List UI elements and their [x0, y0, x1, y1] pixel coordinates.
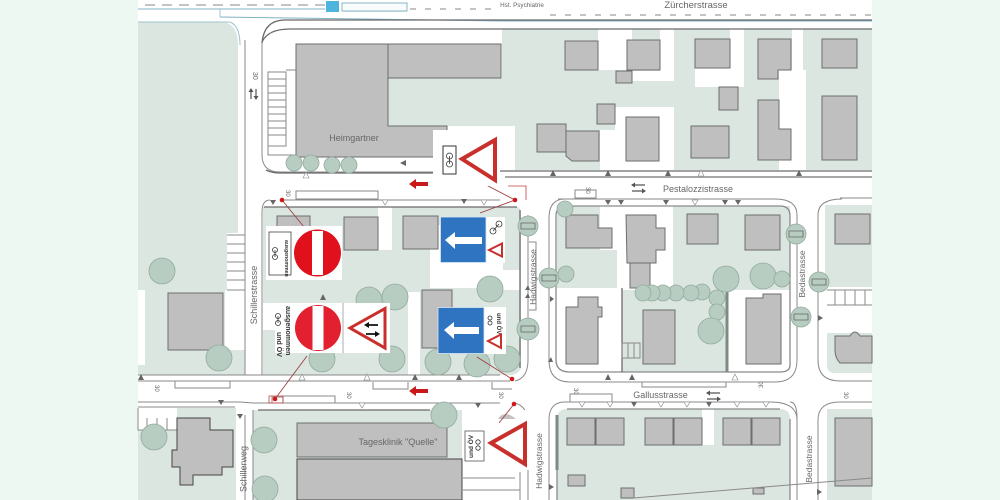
- bus stop marker: [326, 1, 407, 12]
- road markings: one-way arrows and 30 zones: 30: [572, 388, 578, 395]
- supplementary text plate: [275, 306, 291, 357]
- street and place labels: Schillerweg: [238, 446, 248, 492]
- yield triangle: [462, 140, 495, 180]
- yield triangle: [491, 424, 525, 464]
- small warning triangle: [488, 334, 501, 348]
- street and place labels: Bedastrasse: [797, 250, 807, 298]
- plate: und ÖV: [466, 434, 475, 458]
- no entry disc: [295, 305, 341, 351]
- panel: green plots: [138, 22, 872, 500]
- road markings: one-way arrows and 30 zones: 30: [759, 381, 765, 388]
- diagonal line: [633, 478, 872, 498]
- plate text: und ÖV: [495, 313, 502, 334]
- street and place labels: Hadwigstrasse: [528, 249, 538, 305]
- road markings: one-way arrows and 30 zones: [153, 72, 848, 402]
- street and place labels: Zürcherstrasse: [664, 0, 728, 11]
- sign: no entry and two-way traffic warning: [263, 303, 390, 357]
- buildings: [168, 39, 872, 500]
- sign: one-way with bicycles and public transport, Gallus side: [438, 307, 506, 354]
- two-way warning triangle: [350, 308, 385, 348]
- road markings: one-way arrows and 30 zones: 30: [584, 187, 590, 194]
- arrow: red direction Pestalozzistrasse: [409, 179, 428, 189]
- road markings: one-way arrows and 30 zones: 30: [153, 385, 159, 392]
- small warning triangle: [489, 244, 502, 256]
- no entry disc: [294, 230, 341, 276]
- road markings: one-way arrows and 30 zones: 30: [345, 392, 351, 399]
- street and place labels: Gallusstrasse: [633, 390, 688, 400]
- road markings: one-way arrows and 30 zones: 30: [497, 392, 503, 399]
- panel: road lines: [138, 5, 872, 500]
- supplementary plate: ausgenommen: [283, 240, 289, 277]
- street and place labels: Hst. Psychiatrie: [500, 2, 544, 9]
- sign: yield with bicycle plate, Pestalozzistrasse: [433, 130, 500, 186]
- street and place labels: Schillerstrasse: [249, 266, 259, 324]
- map: base plan: [138, 0, 872, 500]
- street and place labels: Hadwigstrasse: [534, 433, 544, 489]
- supplementary text plate: und ÖV: [275, 332, 284, 357]
- sign: yield with bicycle and public transport plate, Hadwigstrasse: [463, 402, 530, 470]
- bicycle: [490, 221, 502, 234]
- street and place labels: Tagesklinik "Quelle": [359, 437, 437, 447]
- panel: white yards and drives: [138, 28, 806, 445]
- trees: [141, 155, 829, 500]
- arrow: red direction Gallusstrasse: [409, 386, 428, 396]
- street and place labels: Bedastrasse: [804, 435, 814, 483]
- road markers: triangles: [138, 160, 823, 495]
- white arrow: [445, 232, 482, 249]
- road markings: one-way arrows and 30 zones: 30: [842, 392, 848, 399]
- supplementary text plate: ausgenommen: [284, 306, 291, 355]
- road markings: one-way arrows and 30 zones: 30: [284, 190, 290, 197]
- bicycle plate: [443, 146, 456, 174]
- street and place labels: [238, 0, 814, 492]
- road markings: one-way arrows and 30 zones: 30: [251, 72, 258, 80]
- sign locator lines and dots: [269, 175, 526, 403]
- white arrow: [444, 322, 479, 339]
- lower white forecourt: [463, 472, 520, 500]
- sign: one-way with bicycles, Pestalozzi side: [440, 217, 505, 263]
- bicycle: [488, 316, 492, 325]
- street and place labels: Pestalozzistrasse: [663, 184, 733, 194]
- sign: no entry, bicycles excepted: [266, 226, 342, 280]
- street and place labels: Heimgartner: [329, 133, 379, 143]
